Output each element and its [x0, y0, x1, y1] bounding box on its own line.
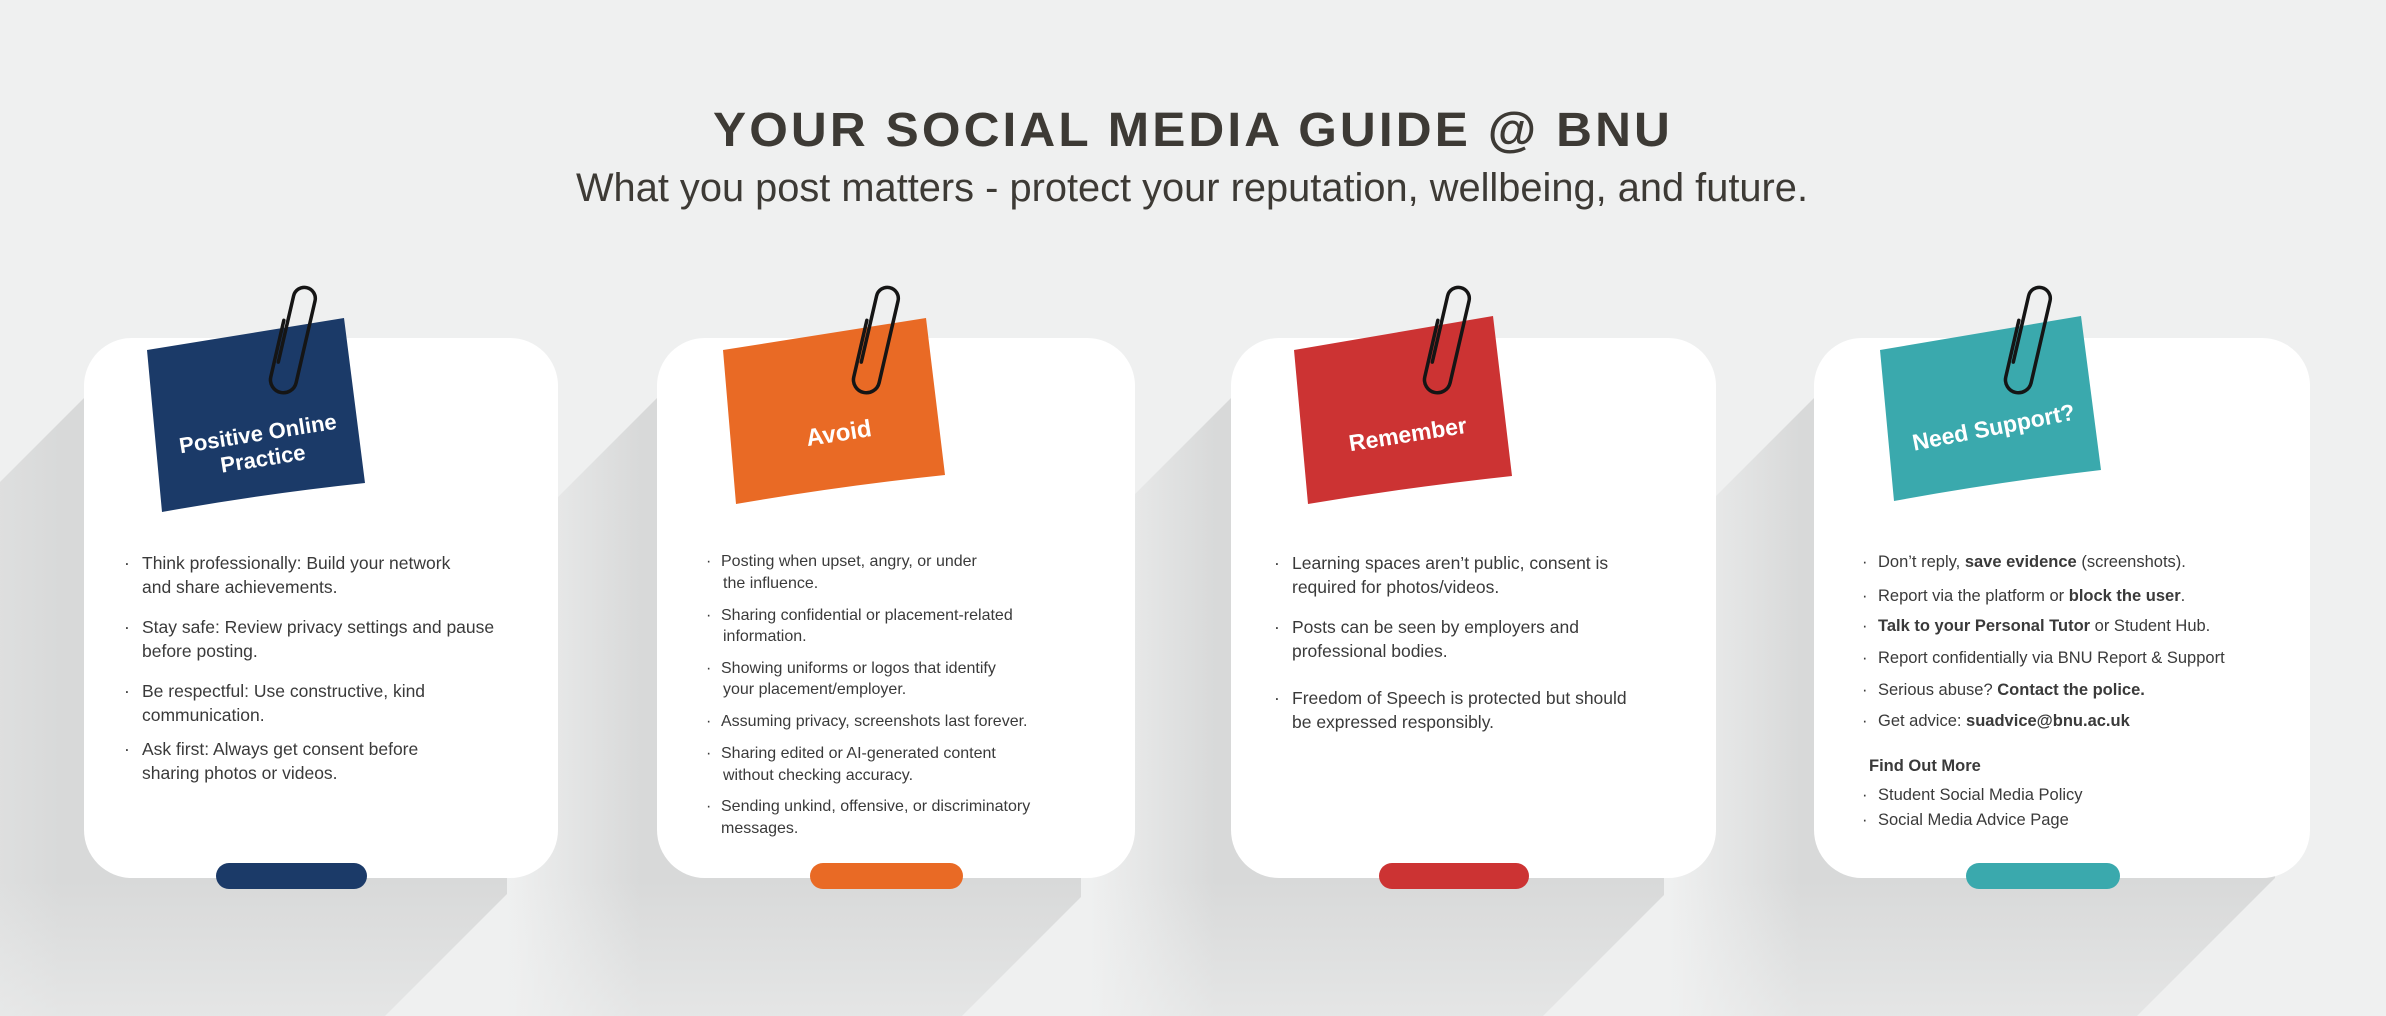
text: remember list: required for photos/videos. — [1292, 577, 1499, 597]
text: support list — [1862, 553, 2225, 829]
tab — [1379, 863, 1529, 889]
text: positive list — [124, 553, 494, 783]
note: Avoid: Avoid — [804, 415, 873, 452]
tab — [1966, 863, 2120, 889]
note: Need Support? — [1880, 316, 2101, 501]
text: remember list — [1274, 553, 1627, 732]
text: support list: Get advice: suadvice@bnu.ac.uk — [1878, 712, 2131, 730]
text: support list: · — [1862, 649, 1868, 667]
text: remember list: Learning spaces aren’t public, consent is — [1292, 553, 1608, 573]
panel: Need Support? — [1814, 284, 2310, 889]
text: avoid list: Assuming privacy, screenshots last forever. — [721, 713, 1028, 730]
text: support list: · — [1862, 811, 1868, 829]
text: avoid list: Sharing edited or AI-generated content — [721, 745, 996, 762]
icon: paperclip — [268, 284, 318, 395]
text: remember list: Posts can be seen by employers and — [1292, 617, 1579, 637]
text: positive list: and share achievements. — [142, 577, 338, 597]
text: avoid list: your placement/employer. — [723, 681, 906, 698]
text: positive list: before posting. — [142, 641, 258, 661]
text: support list: · — [1862, 712, 1868, 730]
text: remember list: be expressed responsibly. — [1292, 712, 1494, 732]
tab — [810, 863, 963, 889]
text: avoid list: the influence. — [723, 575, 818, 592]
text: positive list: Be respectful: Use constructive, kind — [142, 681, 425, 701]
text: support list: Find Out More — [1869, 757, 1981, 775]
panel: Remember — [1231, 284, 1716, 889]
text: avoid list: messages. — [721, 820, 798, 837]
text: avoid list: · — [706, 553, 711, 570]
subtitle: What you post matters - protect your reputation, wellbeing, and future. — [576, 166, 1808, 210]
text: remember list: Freedom of Speech is protected but should — [1292, 688, 1627, 708]
text: support list: · — [1862, 786, 1868, 804]
text: remember list: · — [1274, 688, 1280, 708]
text: support list: · — [1862, 617, 1868, 635]
text: support list: Talk to your Personal Tutor or Student Hub. — [1878, 617, 2210, 635]
text: support list: Student Social Media Policy — [1878, 786, 2083, 804]
text: positive list: Ask first: Always get consent before — [142, 739, 418, 759]
icon: paperclip — [851, 284, 901, 395]
note: Need Support?: Need Support? — [1910, 399, 2077, 456]
text: avoid list: · — [706, 607, 711, 624]
text: support list: Don’t reply, save evidence (screenshots). — [1878, 553, 2186, 571]
text: avoid list: information. — [723, 628, 807, 645]
panel: Positive Online Practice — [84, 284, 558, 889]
icon: paperclip — [2003, 284, 2053, 395]
tab — [216, 863, 367, 889]
text: positive list: · — [124, 617, 130, 637]
text: support list: Serious abuse? Contact the police. — [1878, 681, 2145, 699]
text: avoid list: Posting when upset, angry, or under — [721, 553, 978, 570]
note: Positive Online Practice — [147, 318, 365, 512]
icon: paperclip — [1422, 284, 1472, 395]
note: Positive Online Practice: Positive Online — [177, 409, 338, 458]
text: support list: Report via the platform or block the user. — [1878, 587, 2185, 605]
text: avoid list: · — [706, 745, 711, 762]
note: Positive Online Practice: Practice — [219, 440, 307, 478]
title: YOUR SOCIAL MEDIA GUIDE @ BNU — [713, 104, 1673, 157]
text: avoid list: · — [706, 660, 711, 677]
text: positive list: · — [124, 681, 130, 701]
text: avoid list: Sending unkind, offensive, or discriminatory — [721, 798, 1030, 815]
panel: Avoid — [657, 284, 1135, 889]
text: remember list: · — [1274, 553, 1280, 573]
text: remember list: · — [1274, 617, 1280, 637]
text: positive list: Think professionally: Build your network — [142, 553, 451, 573]
text: positive list: Stay safe: Review privacy settings and pause — [142, 617, 494, 637]
text: avoid list: · — [706, 798, 711, 815]
text: support list: · — [1862, 587, 1868, 605]
note: Remember: Remember — [1347, 412, 1469, 456]
text: avoid list: without checking accuracy. — [722, 767, 913, 784]
long shadows — [0, 388, 2386, 1016]
text: remember list: professional bodies. — [1292, 641, 1448, 661]
note: Remember — [1294, 316, 1512, 504]
text: positive list: sharing photos or videos. — [142, 763, 338, 783]
text: support list: · — [1862, 553, 1868, 571]
text: avoid list: · — [706, 713, 711, 730]
text: avoid list — [706, 553, 1030, 837]
text: support list: · — [1862, 681, 1868, 699]
text: positive list: · — [124, 553, 130, 573]
text: positive list: communication. — [142, 705, 265, 725]
text: support list: Report confidentially via BNU Report & Support — [1878, 649, 2225, 667]
text: support list: Social Media Advice Page — [1878, 811, 2069, 829]
text: positive list: · — [124, 739, 130, 759]
text: avoid list: Showing uniforms or logos that identify — [721, 660, 996, 677]
note: Avoid — [723, 318, 945, 504]
text: avoid list: Sharing confidential or placement-related — [721, 607, 1013, 624]
